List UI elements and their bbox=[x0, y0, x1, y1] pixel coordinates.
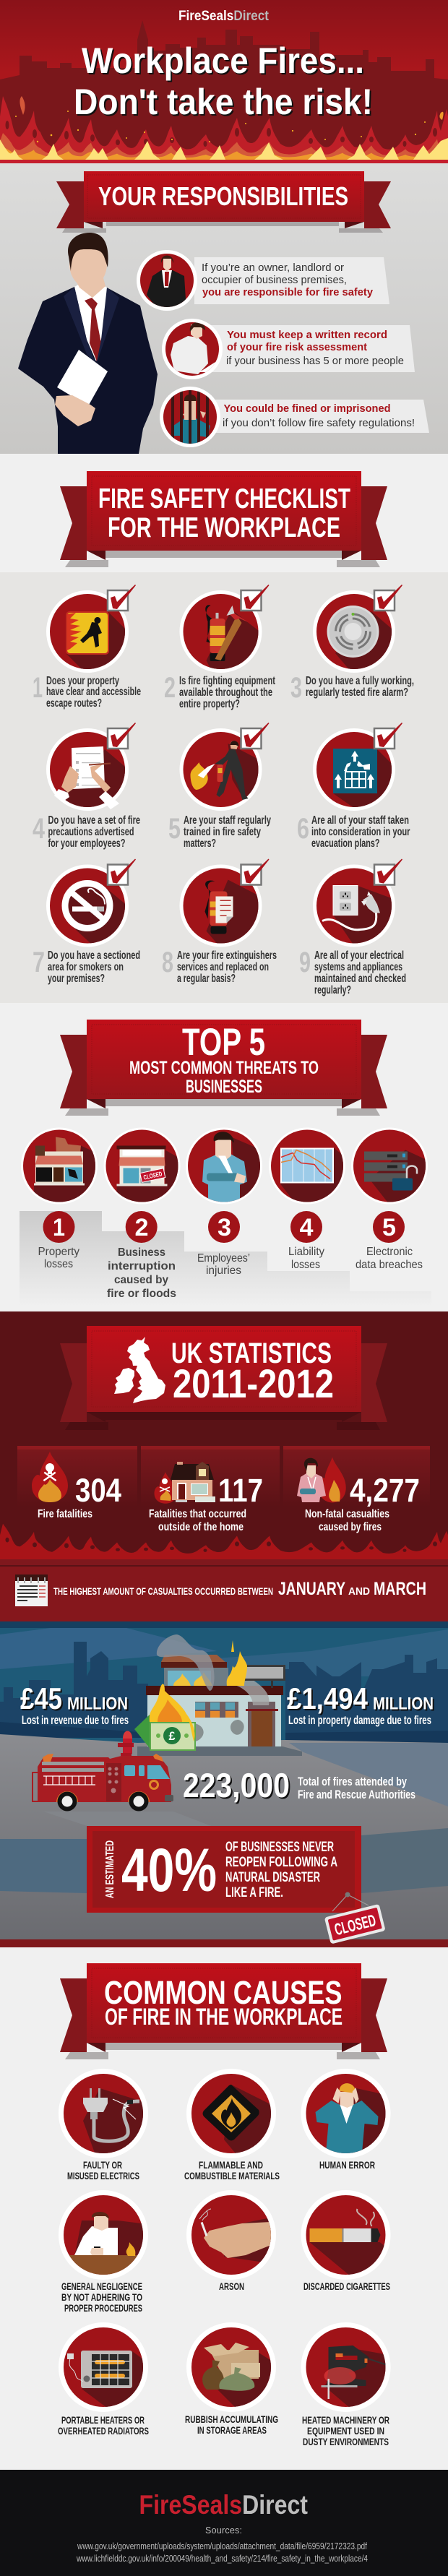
closed sign bbox=[324, 1892, 386, 1944]
question: have clear and accessible bbox=[46, 686, 141, 698]
cause: negligence: GENERAL NEGLIGENCE bbox=[61, 2281, 142, 2292]
label: data breaches bbox=[356, 1259, 423, 1271]
question bbox=[314, 949, 406, 996]
panel: checklist bbox=[0, 572, 448, 1003]
cause: arson: ARSON bbox=[219, 2281, 244, 2292]
cause: machinery: HEATED MACHINERY OR bbox=[302, 2415, 389, 2426]
icon: injured person and flame bbox=[297, 1457, 346, 1503]
banner: fire safety checklist bbox=[60, 471, 387, 567]
text: record: of your fire risk assessment bbox=[227, 342, 367, 353]
header panel bbox=[0, 0, 448, 163]
label: Employees’ bbox=[197, 1252, 250, 1265]
panel: city fire scene bbox=[0, 1621, 448, 1947]
label bbox=[356, 1246, 423, 1271]
item 7: smoking bbox=[33, 858, 145, 985]
banner: top 5: TOP 5 bbox=[182, 1021, 265, 1064]
icon: skull flame bbox=[32, 1452, 68, 1502]
label: interruption bbox=[108, 1260, 176, 1272]
item 8: servicing bbox=[162, 858, 279, 985]
cause: flammable bbox=[184, 2069, 280, 2181]
sources bbox=[76, 2525, 368, 2564]
stat: 304: Fire fatalities bbox=[38, 1508, 92, 1520]
panel: checklist heading bbox=[0, 454, 448, 572]
item: record bbox=[162, 319, 223, 379]
casualties strip: MARCH bbox=[374, 1579, 426, 1599]
banner: your responsibilities: YOUR RESPONSIBILITIES bbox=[98, 181, 348, 211]
callout: 40% bbox=[87, 1826, 361, 1913]
stat: 117: 117 bbox=[218, 1472, 263, 1509]
label bbox=[107, 1246, 176, 1300]
logo: FireSealsDirect bbox=[178, 9, 270, 24]
callout: 40%: 40% bbox=[121, 1836, 217, 1904]
banner: fire safety checklist: FOR THE WORKPLACE bbox=[108, 512, 340, 543]
smoke bbox=[157, 1634, 215, 1691]
casualties strip bbox=[0, 1567, 448, 1621]
number bbox=[290, 1211, 322, 1243]
cause: machinery bbox=[301, 2322, 396, 2447]
threat 4: liability: 4 bbox=[299, 1214, 314, 1241]
stat: 4,277: caused by fires bbox=[319, 1521, 382, 1533]
number: 7 bbox=[33, 947, 45, 978]
question: Are all of your electrical bbox=[314, 949, 404, 962]
threat 2: business interruption: CLOSED bbox=[143, 1170, 163, 1181]
cause: flammable: COMBUSTIBLE MATERIALS bbox=[184, 2171, 280, 2181]
question: maintained and checked bbox=[314, 973, 406, 985]
stat: £1,494 million: MILLION bbox=[373, 1694, 434, 1714]
item 4: precautions bbox=[33, 723, 145, 850]
banner: UK statistics bbox=[60, 1326, 387, 1430]
bottom band bbox=[0, 1939, 448, 1947]
number: 3 bbox=[290, 672, 302, 704]
question: Do you have a set of fire bbox=[48, 814, 140, 827]
banner: UK statistics: UK STATISTICS bbox=[171, 1337, 332, 1369]
stat: 304: 304 bbox=[75, 1472, 121, 1509]
number bbox=[208, 1211, 240, 1243]
question: area for smokers on bbox=[48, 961, 124, 973]
stat: 4,277: 4,277 bbox=[350, 1472, 420, 1509]
question: your premises? bbox=[48, 973, 105, 985]
item 5: training bbox=[168, 723, 279, 850]
banner: fire safety checklist: FIRE SAFETY CHECKLIST bbox=[98, 483, 350, 514]
threat 5: data breaches bbox=[351, 1127, 428, 1268]
banner: common causes bbox=[60, 1963, 387, 2059]
city skyline bbox=[0, 20, 448, 160]
burning building bbox=[134, 1634, 302, 1756]
number bbox=[373, 1211, 405, 1243]
question: regularly tested fire alarm? bbox=[306, 686, 408, 699]
question: services and replaced on bbox=[177, 961, 269, 973]
question: trained in fire safety bbox=[184, 826, 261, 838]
threat 1: property losses: 1 bbox=[53, 1214, 65, 1241]
cause: negligence: BY NOT ADHERING TO bbox=[61, 2292, 142, 2303]
number bbox=[43, 1211, 75, 1243]
stepped background bbox=[20, 1211, 431, 1305]
question: Are all of your staff taken bbox=[311, 814, 409, 827]
panel: top 5 threats bbox=[20, 1020, 428, 1297]
question: systems and appliances bbox=[314, 961, 402, 973]
label: losses bbox=[44, 1258, 73, 1270]
question: Does your property bbox=[46, 675, 119, 687]
text: prison: if you don’t follow fire safety regulations! bbox=[223, 418, 415, 429]
number: 2 bbox=[164, 672, 176, 704]
question bbox=[48, 949, 140, 985]
banner: common causes: COMMON CAUSES bbox=[104, 1974, 343, 2011]
text: prison: You could be fined or imprisoned bbox=[224, 403, 390, 415]
question: escape routes? bbox=[46, 697, 102, 710]
cause: machinery: DUSTY ENVIRONMENTS bbox=[303, 2437, 389, 2447]
flames bbox=[0, 1524, 448, 1559]
question: for your employees? bbox=[48, 837, 126, 850]
stat: 117 bbox=[141, 1446, 280, 1533]
icon: house and flame bbox=[155, 1462, 215, 1504]
threat 5: data breaches: 5 bbox=[382, 1214, 396, 1241]
label: Business bbox=[118, 1246, 165, 1259]
label bbox=[288, 1246, 324, 1271]
banner: top 5: BUSINESSES bbox=[186, 1077, 262, 1097]
question: a regular basis? bbox=[177, 973, 236, 985]
cause: negligence bbox=[59, 2190, 148, 2314]
sources: Sources: bbox=[205, 2525, 242, 2536]
item: prison bbox=[160, 387, 220, 447]
question: Do you have a sectioned bbox=[48, 949, 140, 962]
threat 3: injuries: 3 bbox=[217, 1214, 231, 1241]
stat: £45 million: MILLION bbox=[67, 1694, 128, 1714]
text: responsible: If you’re an owner, landlord or bbox=[202, 262, 344, 274]
question bbox=[48, 814, 140, 850]
flames bbox=[0, 96, 448, 160]
cause: electrics: MISUSED ELECTRICS bbox=[67, 2171, 139, 2181]
panel: common causes bbox=[58, 1963, 390, 2445]
banner: common causes: OF FIRE IN THE WORKPLACE bbox=[105, 2004, 343, 2030]
label: Liability bbox=[288, 1246, 324, 1258]
question: Is fire fighting equipment bbox=[179, 675, 275, 687]
stat: £45 million: £45 bbox=[20, 1681, 62, 1715]
item 9: electrical bbox=[299, 858, 412, 996]
fire truck bbox=[33, 1754, 173, 1811]
casualties strip: THE HIGHEST AMOUNT OF CASUALTIES OCCURRED BETWEEN bbox=[53, 1585, 273, 1597]
stat: 4,277 bbox=[283, 1446, 430, 1533]
question: into consideration in your bbox=[311, 826, 410, 838]
label: caused by bbox=[114, 1274, 168, 1286]
label: Property bbox=[38, 1246, 79, 1258]
money: £ bbox=[169, 1729, 176, 1743]
cause: flammable: FLAMMABLE AND bbox=[199, 2160, 263, 2171]
question bbox=[179, 675, 275, 710]
callout: 40%: NATURAL DISASTER bbox=[225, 1870, 320, 1885]
text: responsible: occupier of business premises, bbox=[202, 275, 347, 286]
label bbox=[38, 1246, 79, 1270]
stat: 117: Fatalities that occurred bbox=[149, 1508, 246, 1520]
threat 3: injuries bbox=[186, 1127, 262, 1276]
threat 2: business interruption: 2 bbox=[134, 1214, 149, 1241]
stat: 223,000: Total of fires attended by bbox=[298, 1775, 407, 1788]
number: 4 bbox=[33, 813, 46, 845]
number bbox=[126, 1211, 158, 1243]
number: 1 bbox=[33, 672, 43, 704]
cause: cigarettes bbox=[301, 2190, 390, 2292]
cause: heaters bbox=[58, 2322, 154, 2437]
label: fire or floods bbox=[107, 1288, 176, 1300]
cause: cigarettes: DISCARDED CIGARETTES bbox=[303, 2281, 390, 2292]
cause: heaters: OVERHEATED RADIATORS bbox=[58, 2426, 149, 2437]
skyline bbox=[0, 1642, 448, 1743]
banner: top 5 bbox=[60, 1020, 387, 1116]
title: Workplace Fires... bbox=[82, 40, 364, 81]
item 2: equipment bbox=[164, 585, 279, 710]
sources: www.gov.uk/government/uploads/system/uploads/attachment_data/file/6959/2172323.pdf bbox=[77, 2541, 367, 2551]
panel: UK statistics bbox=[0, 1311, 448, 1622]
stat: 223,000: 223,000 bbox=[183, 1766, 290, 1804]
cause: machinery: EQUIPMENT USED IN bbox=[307, 2426, 384, 2437]
question: matters? bbox=[184, 837, 216, 850]
label: injuries bbox=[206, 1265, 241, 1277]
item: responsible bbox=[137, 250, 197, 311]
band bbox=[0, 160, 448, 163]
text: prison bbox=[223, 403, 415, 429]
closed sign: CLOSED bbox=[332, 1911, 378, 1939]
title: Don't take the risk! bbox=[74, 82, 373, 122]
cause: human error bbox=[301, 2069, 390, 2171]
UK map bbox=[114, 1337, 165, 1403]
question bbox=[46, 675, 141, 710]
sources: www.lichfielddc.gov.uk/info/200049/health_and_safety/214/fire_safety_in_the_workplace/4 bbox=[76, 2554, 368, 2564]
number: 5 bbox=[168, 813, 181, 845]
title bbox=[74, 40, 373, 122]
label bars bbox=[194, 257, 429, 433]
banner: top 5: MOST COMMON THREATS TO bbox=[129, 1058, 319, 1078]
question: Are your fire extinguishers bbox=[177, 949, 277, 962]
banner: your responsibilities bbox=[56, 171, 391, 233]
question: Are your staff regularly bbox=[184, 814, 271, 827]
question: precautions advertised bbox=[48, 826, 134, 838]
ground bbox=[0, 1734, 448, 1939]
callout: 40%: AN ESTIMATED bbox=[104, 1840, 116, 1898]
stat: £45 million bbox=[20, 1681, 129, 1727]
cause: arson bbox=[186, 2190, 276, 2292]
billboard bbox=[236, 1665, 285, 1681]
label bbox=[197, 1252, 250, 1277]
threat 1: property losses bbox=[21, 1127, 98, 1267]
question: regularly? bbox=[314, 984, 351, 996]
threat 2: business interruption bbox=[104, 1127, 181, 1297]
casualties strip: JANUARY bbox=[278, 1579, 345, 1599]
item 3: alarm bbox=[290, 585, 414, 704]
label: losses bbox=[291, 1259, 320, 1271]
stat: £1,494 million bbox=[287, 1681, 434, 1727]
item 1: escape routes bbox=[33, 585, 141, 710]
text: record: You must keep a written record bbox=[227, 329, 387, 341]
question: entire property? bbox=[179, 698, 240, 710]
question bbox=[311, 814, 410, 850]
threat 4: liability bbox=[269, 1127, 345, 1268]
cause: heaters: PORTABLE HEATERS OR bbox=[61, 2415, 145, 2426]
number: 9 bbox=[299, 947, 311, 978]
hydrant bbox=[118, 1731, 134, 1756]
callout: 40%: REOPEN FOLLOWING A bbox=[225, 1855, 337, 1870]
text: responsible bbox=[202, 262, 373, 298]
callout: 40%: OF BUSINESSES NEVER bbox=[225, 1840, 334, 1855]
question: available throughout the bbox=[179, 686, 272, 699]
item 6: evacuation bbox=[297, 723, 412, 850]
stat: 4,277: Non-fatal casualties bbox=[305, 1508, 389, 1520]
money bbox=[134, 1715, 196, 1751]
text: record: if your business has 5 or more people bbox=[226, 356, 404, 367]
rooftop flames bbox=[227, 1651, 247, 1686]
cause: rubbish bbox=[185, 2322, 282, 2436]
banner: UK statistics: 2011-2012 bbox=[173, 1361, 334, 1406]
cause: rubbish: RUBBISH ACCUMULATING bbox=[185, 2414, 278, 2425]
cause: negligence: PROPER PROCEDURES bbox=[64, 2303, 142, 2314]
text: responsible: you are responsible for fire safety bbox=[202, 287, 373, 298]
panel: your responsibilities bbox=[0, 163, 448, 454]
label: Electronic bbox=[366, 1246, 413, 1258]
callout: 40%: LIKE A FIRE. bbox=[225, 1885, 283, 1900]
stat: 304 bbox=[17, 1446, 137, 1520]
question bbox=[184, 814, 271, 850]
cause: electrics bbox=[59, 2069, 148, 2181]
cause: rubbish: IN STORAGE AREAS bbox=[197, 2425, 267, 2436]
cause: human error: HUMAN ERROR bbox=[319, 2160, 375, 2171]
text: record bbox=[226, 329, 404, 367]
casualties strip: AND bbox=[348, 1585, 370, 1598]
stat: £45 million: Lost in revenue due to fires bbox=[22, 1713, 129, 1727]
question: evacuation plans? bbox=[311, 837, 380, 850]
stat: £1,494 million: £1,494 bbox=[287, 1681, 369, 1715]
question bbox=[177, 949, 277, 985]
icon: calendar bbox=[15, 1575, 48, 1606]
stat: 223,000 bbox=[183, 1766, 415, 1804]
cause: electrics: FAULTY OR bbox=[83, 2160, 122, 2171]
businessman figure bbox=[18, 233, 158, 454]
question bbox=[306, 675, 414, 699]
number: 6 bbox=[297, 813, 309, 845]
logo: FireSealsDirect bbox=[139, 2490, 308, 2520]
number: 8 bbox=[162, 947, 173, 978]
stat: 117: outside of the home bbox=[158, 1521, 244, 1533]
footer bbox=[0, 2470, 448, 2576]
